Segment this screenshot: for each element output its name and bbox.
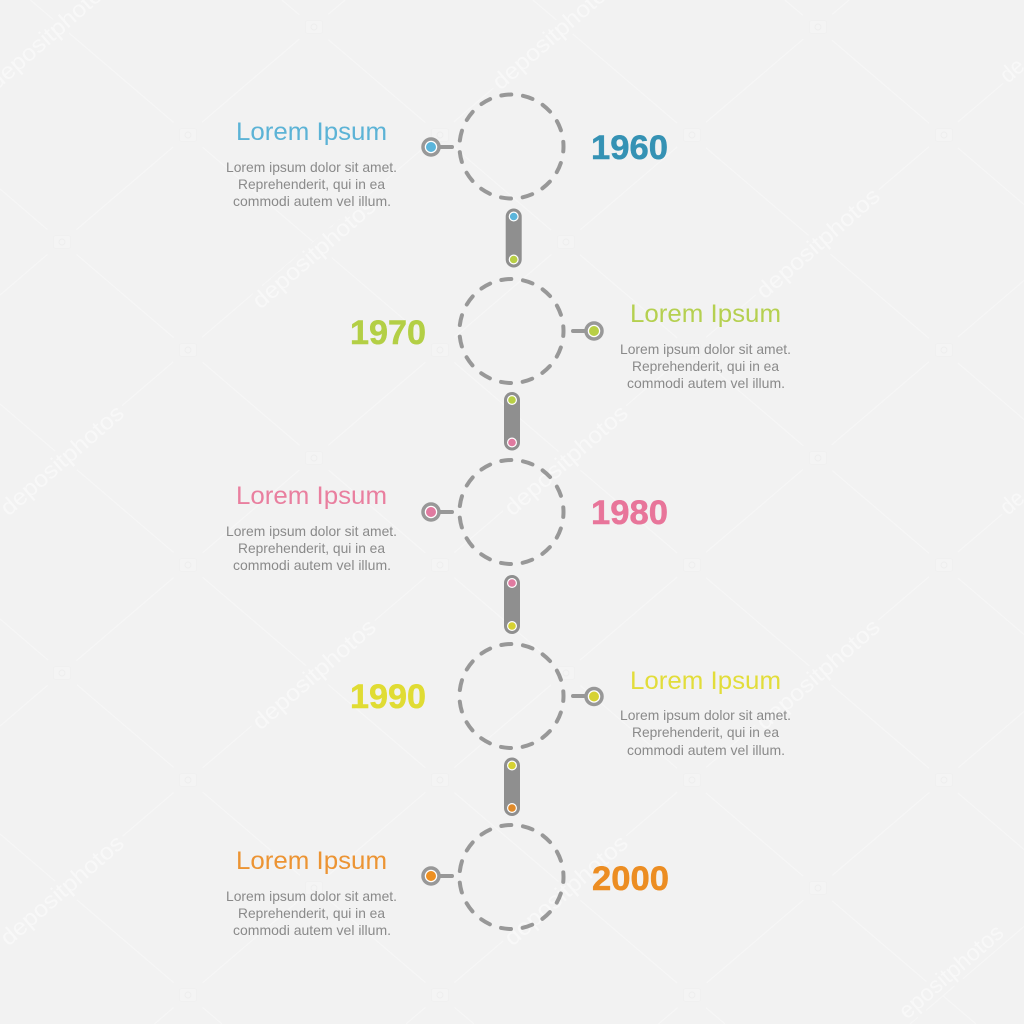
- heading: Lorem Ipsum pink: Lorem Ipsum: [236, 482, 387, 510]
- text block: [620, 341, 791, 391]
- heading: Lorem Ipsum green: Lorem Ipsum: [630, 300, 781, 328]
- marker: orange side pin: [423, 868, 452, 884]
- text block: commodi autem vel illum.: [233, 557, 391, 573]
- text block: Reprehenderit, qui in ea: [238, 540, 385, 556]
- text block: Lorem ipsum dolor sit amet.: [226, 888, 397, 904]
- connector: green to pink: [504, 392, 520, 450]
- marker: blue side pin: [423, 139, 452, 155]
- marker: pink side pin: [423, 504, 452, 520]
- text: depositphotos: [751, 613, 885, 735]
- timeline item: 1970: [350, 279, 791, 391]
- heading: Lorem Ipsum yellow: Lorem Ipsum: [630, 667, 781, 695]
- text block: commodi autem vel illum.: [627, 375, 785, 391]
- timeline item: 1960: [226, 94, 668, 209]
- text block: Lorem ipsum dolor sit amet.: [226, 523, 397, 539]
- text block: Lorem ipsum dolor sit amet.: [226, 159, 397, 175]
- text: epositphotos: [893, 919, 1008, 1024]
- heading: Lorem Ipsum blue: Lorem Ipsum: [236, 118, 387, 146]
- year 1970: 1970: [350, 314, 426, 352]
- text block: commodi autem vel illum.: [233, 193, 391, 209]
- marker: green side pin: [573, 323, 602, 339]
- dashed circle 1970: [460, 279, 564, 383]
- text: depositphotos: [751, 182, 885, 304]
- text: depositphotos: [247, 192, 381, 314]
- timeline item: 2000: [226, 825, 669, 938]
- text block: Reprehenderit, qui in ea: [632, 358, 779, 374]
- text block: [620, 707, 791, 758]
- text block: Lorem ipsum dolor sit amet.: [620, 707, 791, 723]
- year 1960: 1960: [591, 129, 668, 167]
- text block: [226, 159, 397, 209]
- timeline item: 1990: [350, 644, 791, 758]
- text: depositphotos: [247, 613, 381, 735]
- text block: Reprehenderit, qui in ea: [632, 724, 779, 740]
- connector: yellow to orange: [504, 758, 520, 816]
- year 2000: 2000: [592, 860, 669, 898]
- year 1980: 1980: [591, 494, 668, 532]
- timeline item: 1980: [226, 460, 668, 573]
- text block: [226, 888, 397, 938]
- text block: Reprehenderit, qui in ea: [238, 176, 385, 192]
- text: depositphotos: [499, 829, 633, 951]
- heading: Lorem Ipsum orange: Lorem Ipsum: [236, 847, 387, 875]
- dashed circle 1960: [460, 94, 564, 198]
- connector: blue to green: [506, 208, 522, 268]
- text block: Lorem ipsum dolor sit amet.: [620, 341, 791, 357]
- dashed circle 2000: [460, 825, 564, 929]
- marker: yellow side pin: [573, 688, 602, 704]
- dashed circle 1990: [460, 644, 564, 748]
- text block: commodi autem vel illum.: [627, 742, 785, 758]
- text block: commodi autem vel illum.: [233, 922, 391, 938]
- text block: [226, 523, 397, 573]
- year 1990: 1990: [350, 678, 426, 716]
- text block: Reprehenderit, qui in ea: [238, 905, 385, 921]
- connector: pink to yellow: [504, 575, 520, 634]
- text: depositphotos: [499, 399, 633, 521]
- dashed circle 1980: [460, 460, 564, 564]
